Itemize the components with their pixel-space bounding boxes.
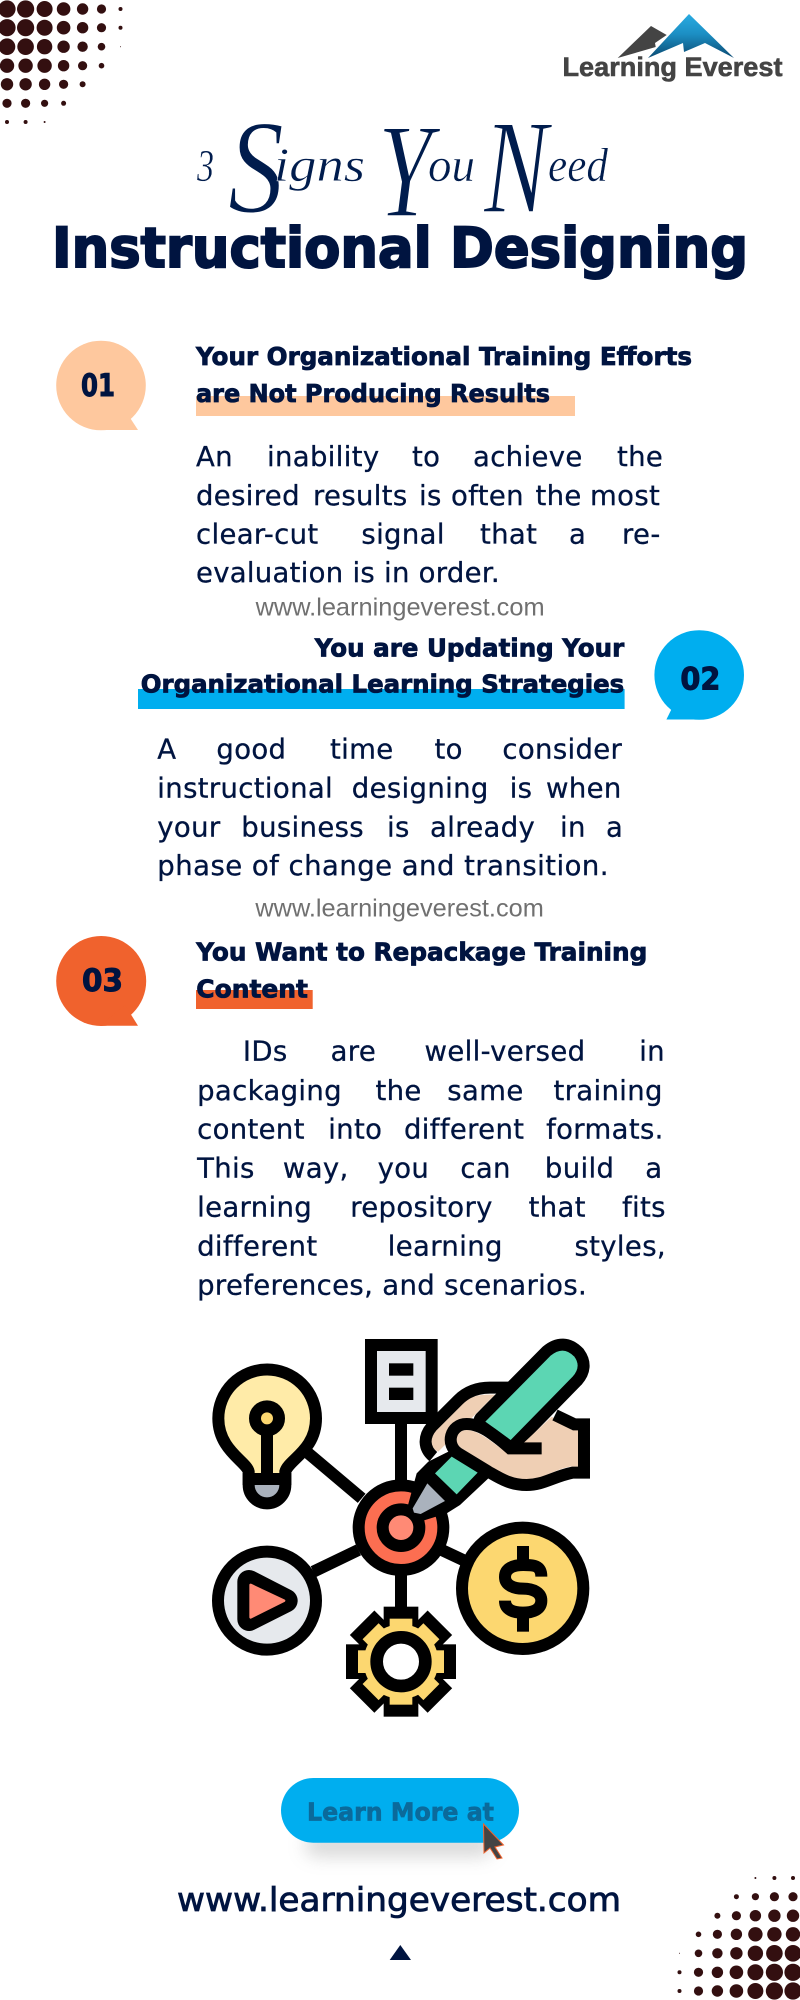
body text: is — [419, 480, 442, 512]
body text: phase of change and transition. — [157, 850, 609, 882]
heading highlight bar — [196, 990, 313, 1009]
badge 03: 03 — [82, 963, 123, 999]
heading: Content — [196, 975, 308, 1004]
body text: results — [313, 480, 408, 512]
heading highlight bar — [138, 689, 625, 709]
icon: target centre — [359, 1485, 443, 1570]
body text: a — [569, 518, 586, 550]
body text: consider — [502, 733, 623, 765]
body text: that — [480, 518, 537, 550]
connector lines — [308, 1420, 467, 1610]
website watermark: www.learningeverest.com — [255, 594, 545, 622]
body text: good — [216, 733, 286, 765]
icon: dollar coin — [462, 1528, 583, 1649]
title: script line: Y — [378, 97, 441, 245]
icon: up triangle — [390, 1945, 411, 1960]
heading: You Want to Repackage Training — [195, 938, 647, 967]
body text — [196, 441, 663, 589]
badge 01 — [56, 341, 146, 430]
heading — [141, 634, 625, 699]
badge 02: 02 — [680, 662, 720, 698]
icon: video play — [218, 1552, 316, 1650]
body text: most — [590, 480, 660, 512]
body text: content — [197, 1114, 305, 1146]
body text: inability — [267, 441, 380, 473]
body text: designing — [352, 772, 489, 804]
body text: way, — [283, 1153, 349, 1185]
body text: build — [545, 1153, 614, 1185]
body text: styles, — [574, 1230, 666, 1262]
body text: packaging — [197, 1075, 342, 1107]
body text: to — [412, 441, 440, 473]
body text: different — [404, 1114, 524, 1146]
body text: to — [434, 733, 463, 765]
title: script line: N — [483, 93, 553, 241]
website watermark: www.learningeverest.com — [254, 895, 544, 923]
body text: the — [376, 1075, 422, 1107]
heading: You are Updating Your — [314, 634, 625, 663]
body text: fits — [622, 1192, 666, 1224]
body text: An — [196, 441, 233, 473]
body text: desired — [196, 480, 300, 512]
body text: business — [241, 812, 364, 844]
body text: clear-cut — [196, 518, 318, 550]
body text: instructional — [157, 772, 333, 804]
body text: are — [331, 1036, 376, 1068]
icon: mouse cursor — [484, 1824, 504, 1859]
icon: hand holding pen — [407, 1351, 584, 1522]
body text: when — [546, 772, 622, 804]
badge 03 — [56, 936, 146, 1026]
title: script line: igns — [274, 139, 365, 192]
body text: can — [460, 1153, 511, 1185]
body text: the — [617, 441, 663, 473]
badge 02 — [654, 630, 744, 720]
body text — [196, 1036, 666, 1301]
body text: your — [157, 812, 221, 844]
body text: the — [536, 480, 582, 512]
body text: well-versed — [424, 1036, 585, 1068]
icon: instructional design network — [218, 1345, 584, 1717]
body text: is — [510, 772, 532, 804]
body text: same — [447, 1075, 524, 1107]
body text: into — [328, 1114, 382, 1146]
body text: a — [606, 812, 623, 844]
heading: are Not Producing Results — [196, 379, 550, 408]
body text: learning — [388, 1230, 503, 1262]
body text: training — [554, 1075, 663, 1107]
title: script line: S — [228, 93, 284, 241]
body text: already — [430, 812, 535, 844]
logo: Learning Everest: Learning Everest — [562, 52, 782, 82]
body text: A — [157, 733, 176, 765]
icon: light bulb — [218, 1369, 316, 1503]
body text: evaluation is in order. — [196, 557, 500, 589]
heading — [195, 938, 647, 1004]
body text: achieve — [473, 441, 583, 473]
heading highlight bar — [196, 396, 575, 416]
title: script line: ou — [428, 139, 475, 192]
body text: signal — [361, 518, 445, 550]
body text — [157, 733, 623, 882]
body text: repository — [350, 1192, 493, 1224]
body text: in — [639, 1036, 665, 1068]
body text: that — [529, 1192, 586, 1224]
title: Instructional Designing: Instructional Designing — [52, 216, 748, 280]
icon: gear — [346, 1607, 456, 1717]
heading — [195, 342, 692, 408]
heading: Organizational Learning Strategies — [141, 670, 624, 699]
title: script line — [196, 93, 609, 245]
body text: is — [387, 812, 410, 844]
title: script line: 3 — [196, 140, 214, 191]
body text: time — [330, 733, 394, 765]
body text: re- — [622, 518, 661, 550]
logo: Learning Everest — [562, 14, 782, 82]
icon: document — [371, 1345, 432, 1418]
decorative dots: top left — [0, 0, 122, 124]
heading: Your Organizational Training Efforts — [195, 342, 692, 371]
body text: different — [197, 1230, 317, 1262]
body text: formats. — [546, 1114, 664, 1146]
panel: sign 2 — [138, 630, 744, 923]
body text: IDs — [243, 1036, 288, 1068]
body text: you — [378, 1153, 429, 1185]
title: script line: eed — [548, 139, 609, 192]
body text: preferences, and scenarios. — [197, 1269, 587, 1301]
website URL: www.learningeverest.com — [177, 1880, 621, 1919]
panel: sign 3 — [56, 936, 666, 1301]
body text: often — [451, 480, 524, 512]
badge 01: 01 — [81, 368, 115, 404]
body text: a — [645, 1153, 663, 1185]
button: Learn More at — [281, 1778, 519, 1856]
body text: learning — [197, 1192, 312, 1224]
button: Learn More at: Learn More at — [307, 1798, 494, 1827]
body text: in — [560, 812, 586, 844]
decorative dots: bottom right — [678, 1876, 800, 2000]
body text: This — [196, 1153, 255, 1185]
panel: sign 1 — [56, 341, 692, 622]
